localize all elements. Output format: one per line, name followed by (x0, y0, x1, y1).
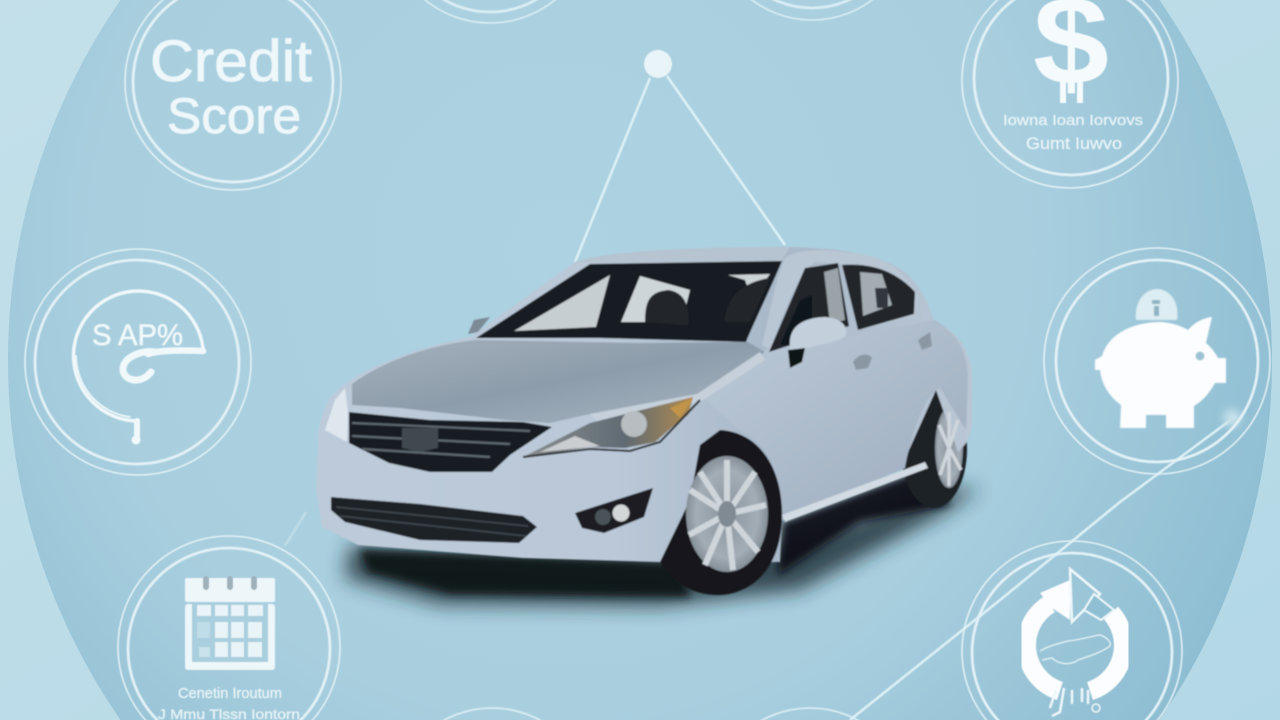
icon: gauge (73, 291, 203, 444)
text: loan terms caption: Iowna Ioan Iorvovs (1003, 112, 1143, 129)
headlight (523, 397, 693, 457)
door handles (853, 355, 872, 370)
text: calendar caption: Cenetin Iroutum (178, 685, 282, 702)
door panel (700, 320, 968, 520)
windshield (476, 261, 782, 342)
icon: cycle arrow (1027, 569, 1123, 716)
car body (316, 247, 972, 562)
windshield reflection centre (621, 276, 690, 322)
panel: APR gauge (25, 249, 251, 475)
icon: calendar (185, 576, 275, 670)
panel: calendar (118, 536, 340, 720)
panel: savings piggy bank (1044, 248, 1270, 474)
partial circle: bottom right (710, 708, 910, 720)
left mirror (468, 317, 490, 334)
fog lamp (575, 488, 653, 533)
grille (349, 412, 552, 472)
side skirt (782, 462, 928, 522)
connector lines: lower corners (285, 409, 1241, 720)
panel: loan terms dollar (962, 0, 1178, 188)
front side window (769, 263, 849, 352)
heading: credit score: Score (167, 88, 301, 144)
panel: refinance cycle (962, 541, 1182, 720)
car illustration (316, 247, 980, 606)
partial circle: top right (712, 0, 912, 20)
front seats (645, 278, 770, 325)
partial circle: top left (387, 0, 593, 23)
text: APR label: S AP% (92, 319, 183, 352)
mirror (790, 317, 846, 352)
windshield reflection left (514, 275, 610, 331)
rear side window (842, 265, 915, 330)
rear wheel (901, 390, 967, 508)
connector lines: triangle from top node (575, 50, 785, 262)
partial circle: bottom left (392, 708, 592, 720)
icon: piggy bank (1095, 289, 1226, 428)
hood (352, 340, 765, 423)
heading: credit score: Credit (150, 29, 312, 94)
car shadow (345, 488, 980, 606)
front wheel (660, 430, 782, 595)
panel: credit score (125, 0, 341, 190)
roof highlight (575, 247, 790, 263)
rear rim spokes (939, 412, 961, 486)
text: loan terms caption: Gumt Iuwvo (1026, 134, 1122, 153)
lower bumper grille (331, 497, 537, 543)
